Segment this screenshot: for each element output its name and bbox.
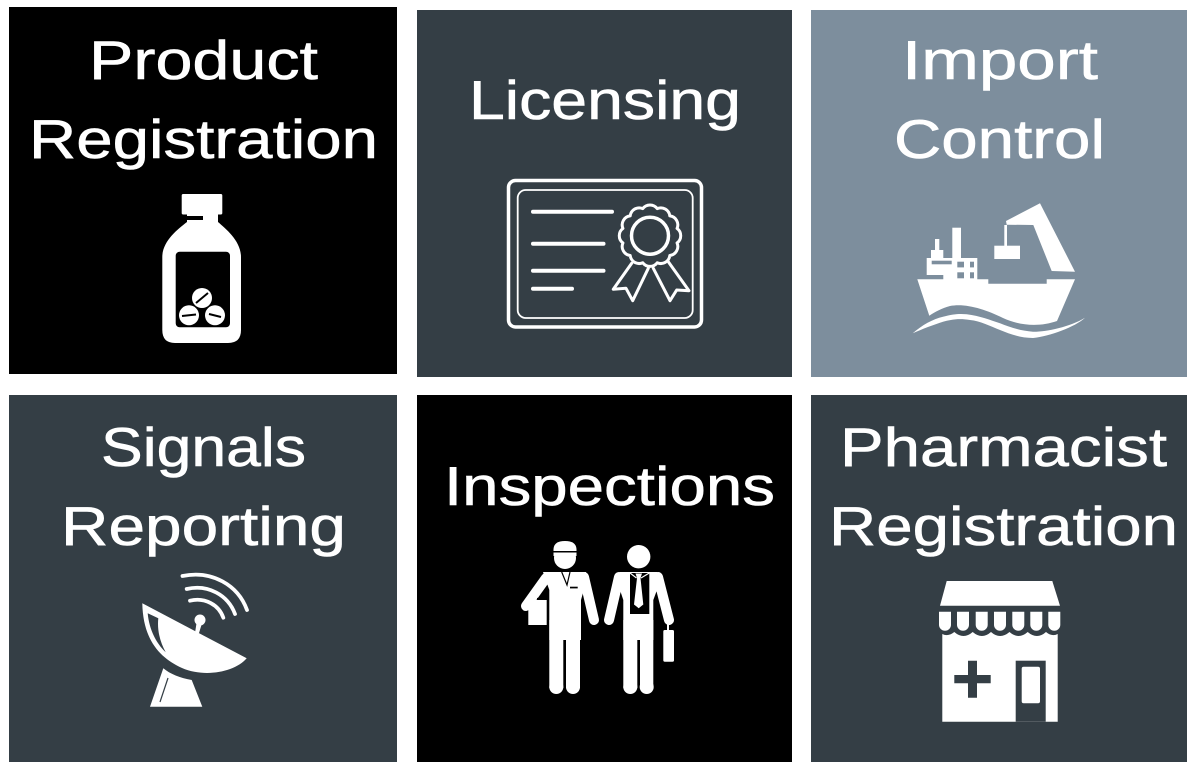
inspector with cap and folder: [526, 541, 594, 694]
panel: licensing: [417, 10, 792, 377]
panel background: [811, 395, 1187, 762]
panel: pharmacist registration: [811, 395, 1187, 762]
heading: pharmacist registration: Pharmacist: [840, 416, 1167, 478]
heading: pharmacist registration: [829, 416, 1178, 557]
icon: medicine bottle: [162, 194, 241, 343]
heading: pharmacist registration: Registration: [829, 495, 1178, 557]
heading: import control: [894, 29, 1105, 170]
heading: signals reporting: Signals: [101, 416, 306, 478]
icon: two inspectors: [526, 541, 674, 694]
icon: pharmacy shop: [939, 581, 1060, 722]
heading: licensing: Licensing: [469, 69, 741, 131]
heading: product registration: Product: [89, 29, 318, 91]
heading: import control: Import: [902, 29, 1098, 91]
heading: import control: Control: [894, 108, 1105, 170]
panel: product registration: [9, 7, 397, 374]
icon: cargo ship: [913, 203, 1085, 338]
panel background: [811, 10, 1187, 377]
panel: import control: [811, 10, 1187, 377]
heading: signals reporting: Reporting: [61, 495, 346, 557]
icon: satellite dish: [142, 575, 247, 707]
icon: certificate: [508, 180, 702, 327]
panel background: [9, 7, 397, 374]
heading: signals reporting: [61, 416, 346, 557]
heading: product registration: Registration: [29, 108, 378, 170]
heading: inspections: Inspections: [444, 455, 775, 517]
panel: inspections: [417, 395, 792, 762]
panel background: [9, 395, 397, 762]
heading: product registration: [29, 29, 378, 170]
panel background: [417, 10, 792, 377]
panel: signals reporting: [9, 395, 397, 762]
panel background: [417, 395, 792, 762]
inspector with tie and briefcase: [609, 545, 674, 694]
